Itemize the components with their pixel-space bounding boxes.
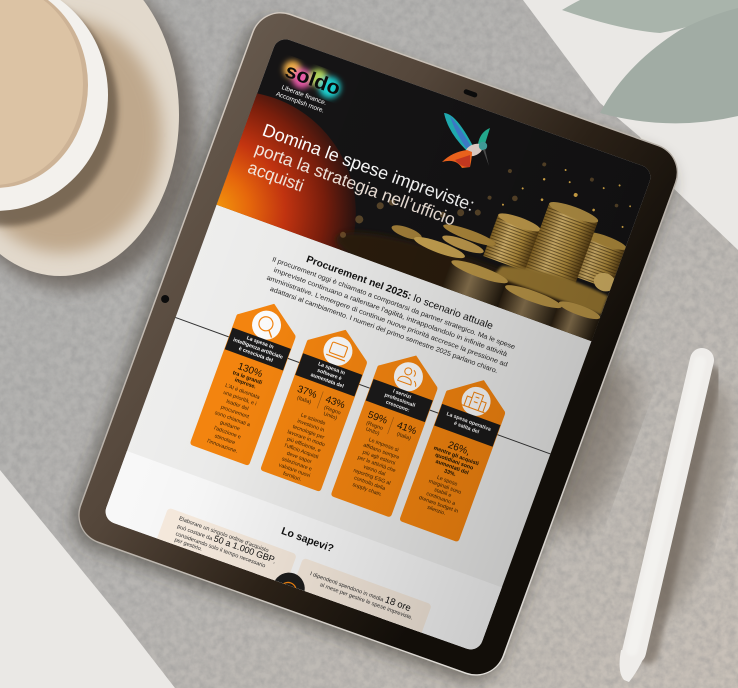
card: professional services: per le attività che [357,455,396,474]
orange glow [216,94,356,253]
screen lighting [208,158,650,650]
fact card: hours: I dipendenti spendono in media 18 ore [309,571,412,614]
intro paragraph: Il procurement oggi è chiamato a comportarsi da partner strategico. Ma le spese [271,256,516,351]
intro paragraph: amministrative. L'emergere di continue nuove priorità accresce la pressione ad [266,275,509,369]
card: AI spend: guidarne [219,420,241,432]
hummingbird [442,113,490,168]
card: AI spend: leader del [225,399,249,412]
icon: laptop [323,336,352,366]
card: operating spend: stabili e [433,487,452,499]
card: software spend: aumentata del [310,372,345,390]
card: AI spend: La spesa in [246,335,274,351]
card: operating spend: 33%. [443,468,457,478]
card: operating spend: silenzio. [426,505,446,517]
card: operating spend: mentre gli acquisti [433,445,480,467]
card: software spend: (Italia) [296,395,312,406]
card: software spend: software è [316,368,342,382]
side camera [160,294,170,304]
logo: soldo [282,60,343,100]
card: software spend: lavorare in modo [286,429,326,448]
card: professional services: I servizi [392,389,412,401]
card: software spend: 43% [324,394,347,411]
card: software spend: (Regno [323,405,341,417]
headline: acquisti [245,157,307,196]
card: software spend: investono in [296,418,325,434]
card: software spend: La spesa in [317,361,346,377]
card: operating spend [400,380,506,542]
card: AI spend: stimolare [214,433,236,446]
headline: porta la strategia nell’ufficio [252,138,458,230]
card: AI spend: l'adozione e [213,425,242,441]
card: professional services: crescono: [385,400,410,414]
fact card: order cost: considerando solo il tempo necessario [175,531,266,569]
card: AI spend: tra le grandi [232,370,263,386]
gold glitter [340,162,631,238]
card: professional services: affidano sempre [362,442,400,461]
logo: Liberate finance. [281,84,328,107]
card: AI spend: è cresciuta del [238,346,274,364]
card: professional services: professionali [384,392,416,409]
fact card: order cost: Elaborare un singolo ordine d'acquisto [178,516,269,554]
card: software spend: l'ufficio Acquisti [284,443,319,461]
coffee saucer and cup [0,0,196,290]
front camera [463,89,478,98]
heading: did you know: Lo sapevi? [280,525,335,555]
page background [106,39,650,650]
card: AI spend: intelligenza artificiale [232,337,284,361]
card: AI spend: L'AI è diventata [224,383,260,401]
card: professional services: Unito) [365,427,380,437]
card: software spend: tecnologie per [292,424,325,441]
card: operating spend: Le spese [436,475,458,488]
icon: building [462,386,491,416]
card: AI spend: l'innovazione. [206,438,238,455]
card: professional services [331,356,438,517]
card: AI spend: 130% [236,361,264,380]
fact card: order cost: per gestirlo. [173,537,203,553]
stylus pencil [620,360,712,682]
icon: magnifier [252,310,282,340]
card: operating spend: è salita del [453,421,480,436]
fabric lighting [526,348,738,624]
intro paragraph [261,256,516,378]
logo glow [279,57,345,101]
section title: Procurement nel 2025: lo scenario attuale [305,254,495,332]
card: professional services: controllo della [353,475,386,492]
logo [273,57,345,117]
intro paragraph: impreviste continuano a rallentare l'agilità, intrappolandolo in infinite attività [273,267,508,358]
card: professional services: 41% [395,420,418,437]
card: AI spend [190,304,296,466]
card: professional services: vanno dal [362,464,386,478]
card: AI spend: imprese. [234,377,257,391]
card: professional services: reporting ESG al [352,468,391,487]
card: AI spend: sono chiamati a [214,410,251,428]
card: operating spend: 26%, [446,440,471,458]
card: professional services: (Regno [365,420,384,432]
card: AI spend: procurement [220,404,250,420]
card: software spend: valutare nuovi [278,462,311,479]
card: professional services: 59% [366,410,389,427]
card: professional services: più agli esterni [362,449,396,467]
screen [106,39,650,650]
icon: people [394,362,423,392]
lower coin columns [442,264,507,308]
fact card: order cost [157,508,296,584]
card: software spend: 37% [296,384,318,401]
fact card: hours: al mese per gestire le spese impreviste. [319,582,414,622]
card: operating spend: drenare budget in [418,495,459,515]
intro paragraph: adattarsi al cambiamento. I numeri del primo semestre 2025 parlano chiaro. [269,286,499,375]
card: operating spend: La spesa operativa [446,411,492,433]
card: professional services: (Italia) [396,431,412,442]
card: software spend: Unito) [322,411,338,422]
card: software spend: più efficiente, e [286,436,321,454]
lower section [106,451,502,650]
card: software spend [260,330,367,492]
fact card: order cost: può costare da 50 a 1.000 GBP, [176,524,276,565]
headline: Domina le spese impreviste: [260,120,477,215]
coin stacks [334,202,626,342]
timeline line [176,317,550,454]
card: professional services: supply chain. [352,482,383,498]
card: software spend: fornitori. [282,471,302,483]
card: operating spend: marginali sono [428,478,462,496]
card: software spend: deve saper [286,451,313,465]
center badge icon [275,572,305,591]
leaves [562,0,738,123]
fact card: hours [292,558,431,633]
header panel [216,39,650,342]
card: software spend: selezionare e [281,456,313,473]
card: operating spend: continuano a [425,491,456,507]
logo: Accomplish more. [275,91,325,115]
card: operating spend: quotidiani sono [434,452,475,472]
card: AI spend: una priorità, e i [222,390,257,407]
card: software spend: Le aziende [300,412,326,427]
card: professional services: Le imprese si [368,437,399,454]
header dark background [216,39,650,341]
card: operating spend: aumentati del [435,459,470,477]
